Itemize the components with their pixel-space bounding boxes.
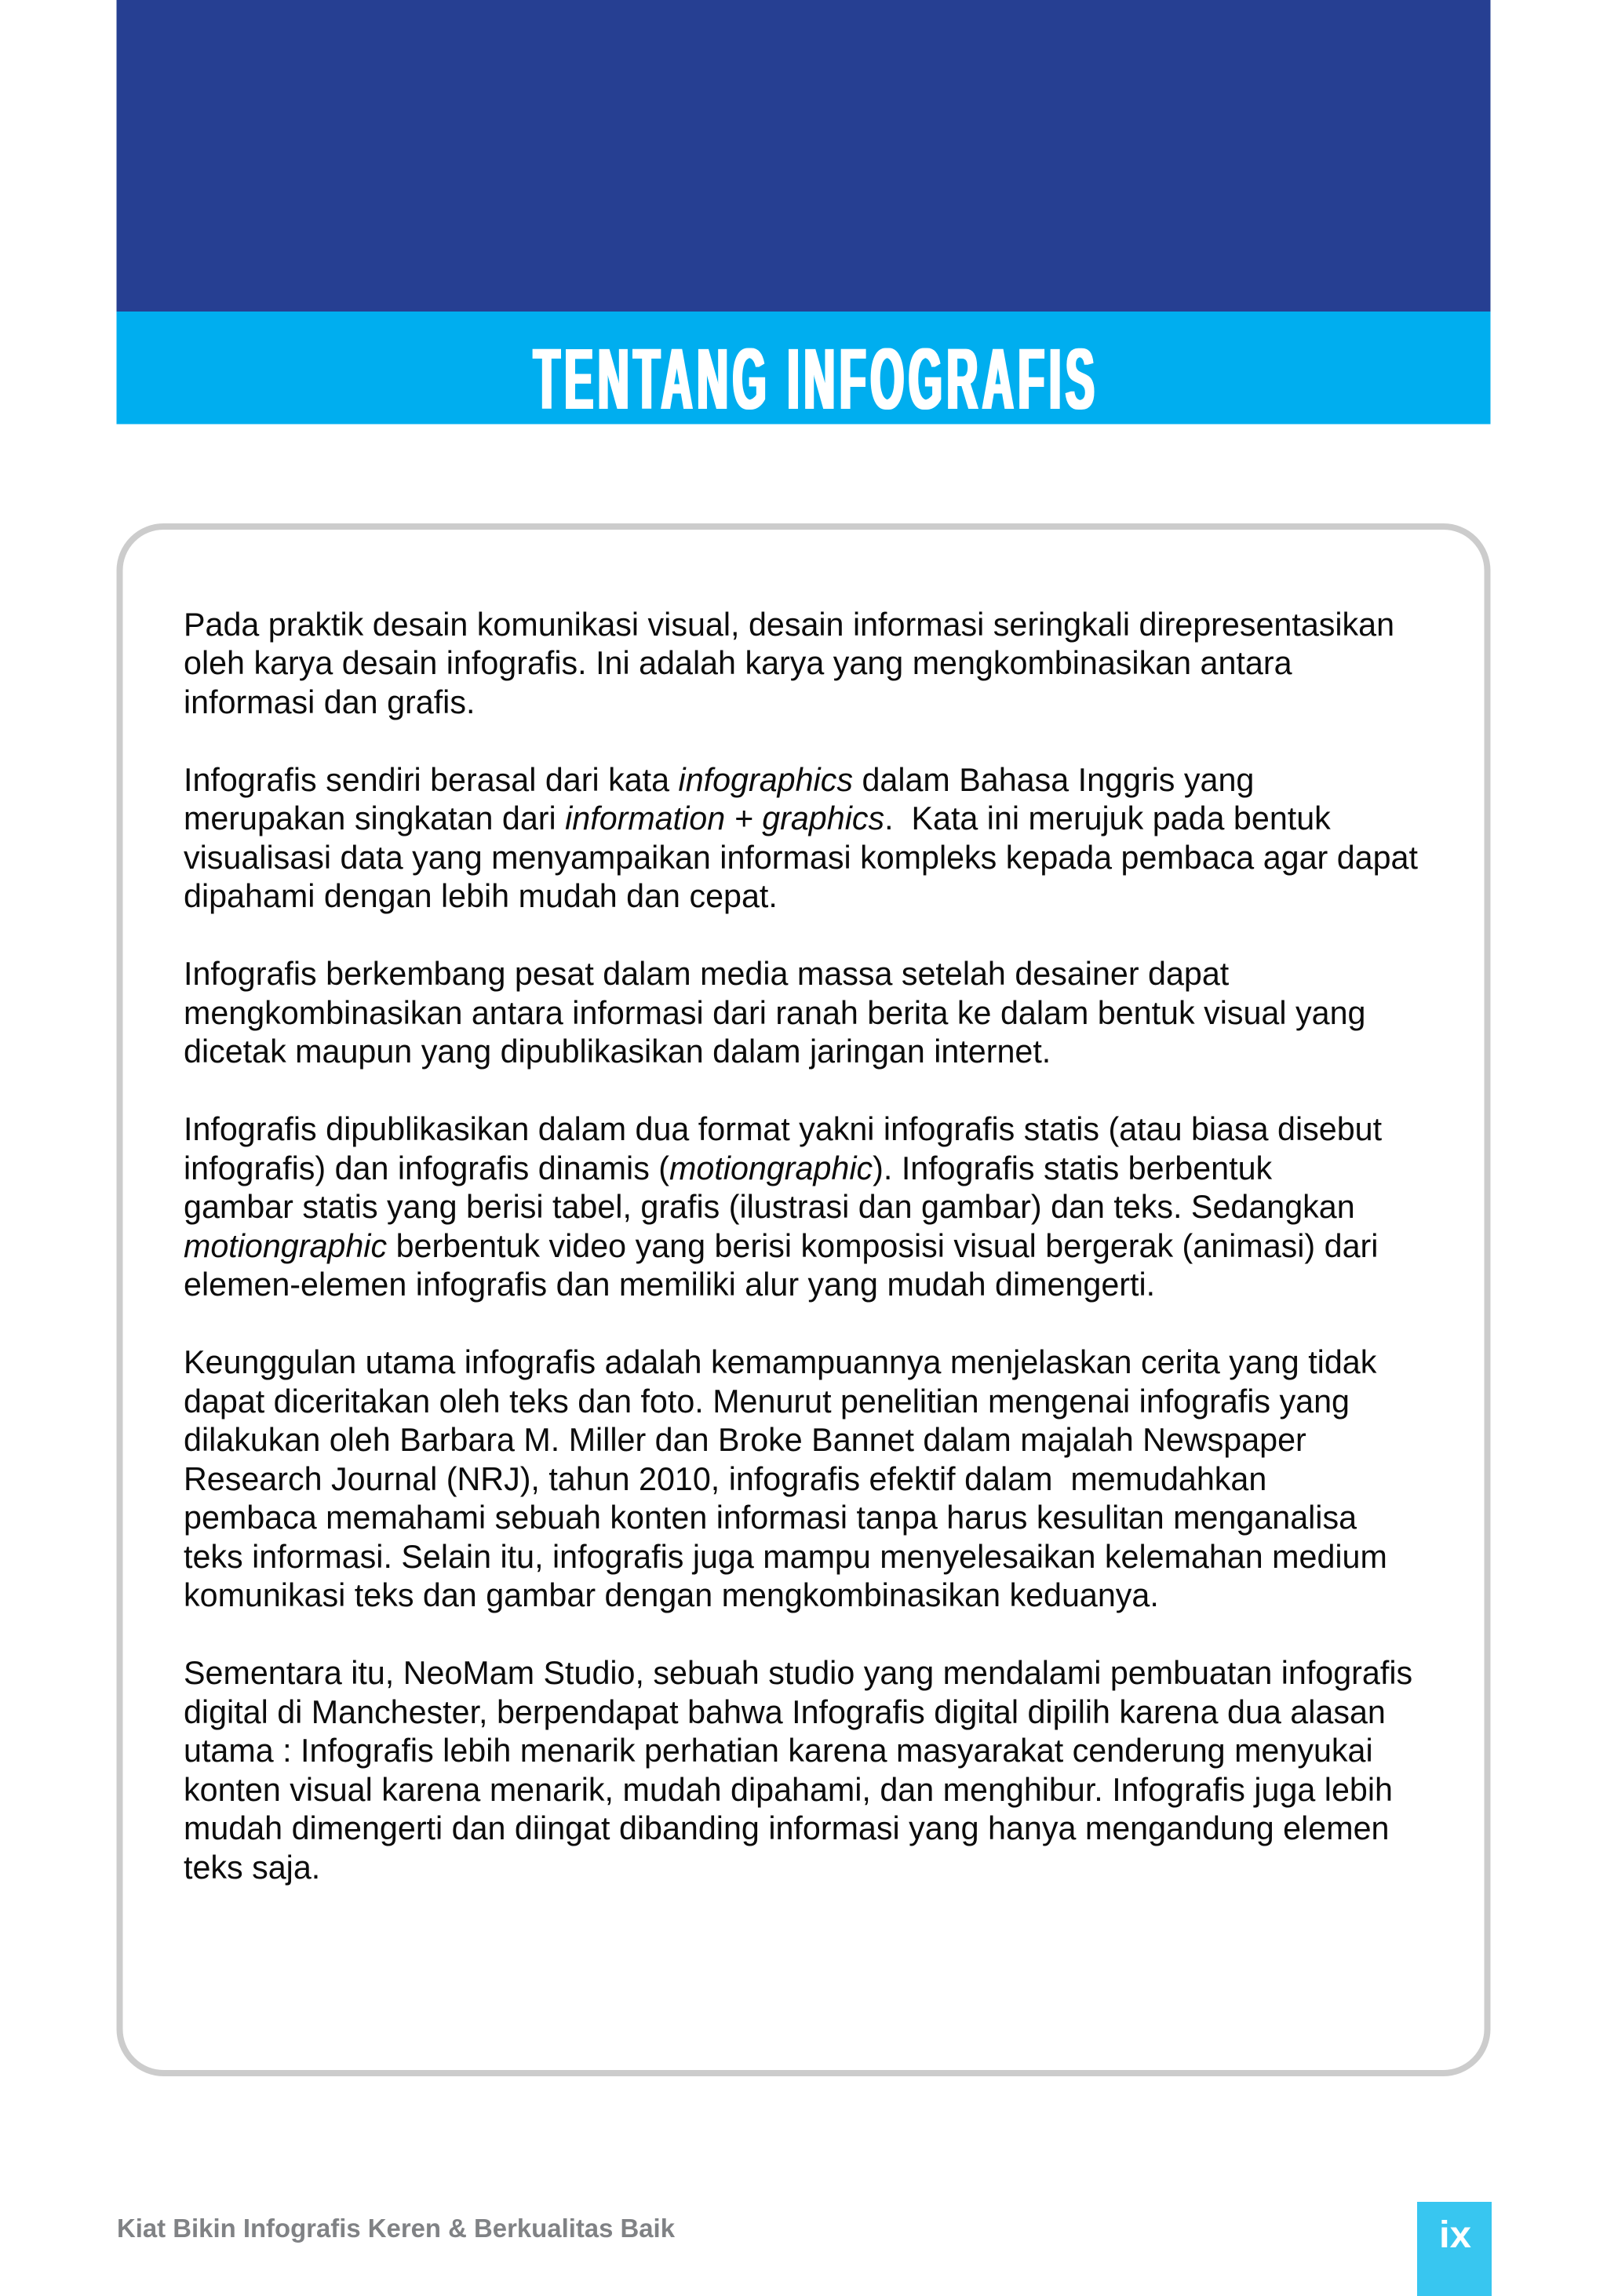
text block: paragraph 2: merupakan singkatan dari information + graphics. Kata ini merujuk pada bentuk: [184, 800, 1331, 836]
text block: paragraph 1: [184, 607, 1394, 720]
title: TENTANG INFOGRAFIS: [534, 331, 1099, 428]
text block: paragraph 2: dipahami dengan lebih mudah dan cepat.: [184, 878, 778, 914]
text block: paragraph 5: dilakukan oleh Barbara M. Miller dan Broke Bannet dalam majalah Newspaper: [184, 1422, 1306, 1458]
text block: paragraph 3: dicetak maupun yang dipublikasikan dalam jaringan internet.: [184, 1033, 1051, 1070]
page number badge: [1417, 2202, 1492, 2296]
text block: paragraph 6: digital di Manchester, berpendapat bahwa Infografis digital dipilih karena dua alasan: [184, 1694, 1386, 1730]
text block: paragraph 5: teks informasi. Selain itu, infografis juga mampu menyelesaikan kelemahan medium: [184, 1539, 1387, 1575]
footer text: Kiat Bikin Infografis Keren & Berkualitas Baik: [117, 2214, 676, 2243]
text block: paragraph 2: visualisasi data yang menyampaikan informasi kompleks kepada pembaca agar dapat: [184, 840, 1418, 876]
text block: paragraph 6: [184, 1655, 1412, 1886]
text block: paragraph 1: Pada praktik desain komunikasi visual, desain informasi seringkali direpresentasikan: [184, 607, 1394, 643]
page number badge: ix: [1439, 2214, 1471, 2256]
text block: paragraph 5: [184, 1344, 1387, 1613]
text block: paragraph 4: motiongraphic berbentuk video yang berisi komposisi visual bergerak (animasi) dari: [184, 1228, 1378, 1264]
text block: paragraph 6: Sementara itu, NeoMam Studio, sebuah studio yang mendalami pembuatan infografis: [184, 1655, 1412, 1691]
text block: paragraph 5: dapat diceritakan oleh teks dan foto. Menurut penelitian mengenai infografis yang: [184, 1383, 1350, 1420]
text block: paragraph 4: Infografis dipublikasikan dalam dua format yakni infografis statis (atau biasa disebut: [184, 1111, 1383, 1147]
text block: paragraph 4: infografis) dan infografis dinamis (motiongraphic). Infografis statis berbentuk: [184, 1150, 1273, 1186]
text block: paragraph 2: Infografis sendiri berasal dari kata infographics dalam Bahasa Inggris yang: [184, 762, 1254, 798]
text block: paragraph 6: mudah dimengerti dan diingat dibanding informasi yang hanya mengandung elemen: [184, 1810, 1389, 1846]
text block: paragraph 5: Research Journal (NRJ), tahun 2010, infografis efektif dalam memudahkan: [184, 1461, 1266, 1497]
text block: paragraph 4: [184, 1111, 1383, 1303]
text block: paragraph 4: gambar statis yang berisi tabel, grafis (ilustrasi dan gambar) dan teks. Sedangkan: [184, 1189, 1355, 1225]
text block: paragraph 6: teks saja.: [184, 1850, 320, 1886]
text block: paragraph 3: Infografis berkembang pesat dalam media massa setelah desainer dapat: [184, 956, 1230, 992]
text block: paragraph 5: pembaca memahami sebuah konten informasi tanpa harus kesulitan menganalisa: [184, 1500, 1357, 1536]
header: title band: [116, 312, 1491, 428]
text block: paragraph 1: oleh karya desain infografis. Ini adalah karya yang mengkombinasikan antara: [184, 645, 1292, 681]
text block: paragraph 4: elemen-elemen infografis dan memiliki alur yang mudah dimengerti.: [184, 1266, 1155, 1303]
text block: paragraph 5: komunikasi teks dan gambar dengan mengkombinasikan keduanya.: [184, 1577, 1159, 1613]
text block: paragraph 5: Keunggulan utama infografis adalah kemampuannya menjelaskan cerita yang tidak: [184, 1344, 1377, 1380]
text block: paragraph 3: [184, 956, 1365, 1070]
text block: paragraph 6: utama : Infografis lebih menarik perhatian karena masyarakat cenderung menyukai: [184, 1733, 1373, 1769]
text block: paragraph 3: mengkombinasikan antara informasi dari ranah berita ke dalam bentuk visual yang: [184, 995, 1365, 1031]
text block: paragraph 6: konten visual karena menarik, mudah dipahami, dan menghibur. Infografis juga lebih: [184, 1772, 1393, 1808]
header: dark blue band: [116, 0, 1491, 312]
text block: paragraph 2: [184, 762, 1418, 914]
panel: rounded text frame: [119, 527, 1488, 2073]
text block: paragraph 1: informasi dan grafis.: [184, 684, 475, 720]
